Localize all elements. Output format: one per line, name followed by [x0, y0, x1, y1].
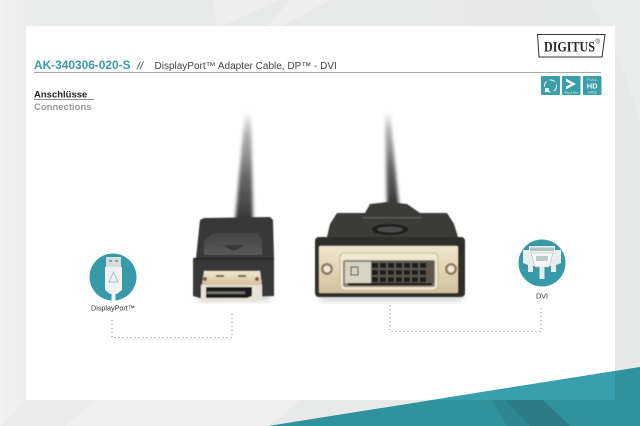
latch [204, 233, 262, 255]
socket [343, 260, 435, 287]
section heading: Anschlüsse [34, 90, 87, 100]
right screw [445, 263, 457, 275]
product title: AK-340306-020-S [34, 58, 131, 72]
icon: full HD: 1080p [588, 90, 597, 94]
product title [34, 58, 337, 72]
product title: DisplayPort™ Adapter Cable, DP™ - DVI [154, 61, 337, 72]
icon: DVI plug badge [518, 240, 566, 286]
pin holes [348, 263, 432, 286]
icon: DisplayPort plug badge [90, 254, 136, 301]
molded housing [327, 202, 458, 237]
icon: plug and play: Plug & Play [564, 90, 579, 94]
teal corner banner [268, 367, 640, 426]
housing [193, 217, 274, 298]
dotted leader: DisplayPort [112, 311, 232, 338]
icon: full HD [583, 76, 602, 95]
gold plate [319, 246, 458, 293]
DIGITUS logo [538, 34, 605, 57]
dotted leader: DVI [390, 305, 541, 332]
feature icons [541, 76, 602, 95]
DVI cable [385, 112, 399, 206]
metal port [201, 285, 262, 302]
connector shadows [198, 292, 462, 300]
inner shell [340, 253, 438, 290]
port opening [206, 287, 252, 298]
DisplayPort connector [193, 217, 274, 302]
section heading: Connections [34, 102, 92, 113]
gold contact shell [202, 271, 262, 285]
logo recess [372, 224, 408, 235]
latch triangle [222, 245, 245, 251]
product title: // [136, 60, 144, 72]
icon: rotation arrows [541, 76, 560, 95]
DIGITUS logo: ® [596, 38, 600, 46]
front body [315, 237, 465, 297]
DIGITUS logo: DIGITUS [544, 40, 595, 56]
DVI connector [315, 202, 465, 297]
section heading [34, 90, 94, 113]
icon: full HD: FULL [587, 77, 598, 82]
left screw [321, 263, 333, 275]
label: DVI: DVI [536, 292, 548, 300]
label: DisplayPort: DisplayPort™ [91, 304, 135, 312]
icon: full HD: HD [587, 82, 598, 90]
DisplayPort cable [235, 112, 253, 222]
